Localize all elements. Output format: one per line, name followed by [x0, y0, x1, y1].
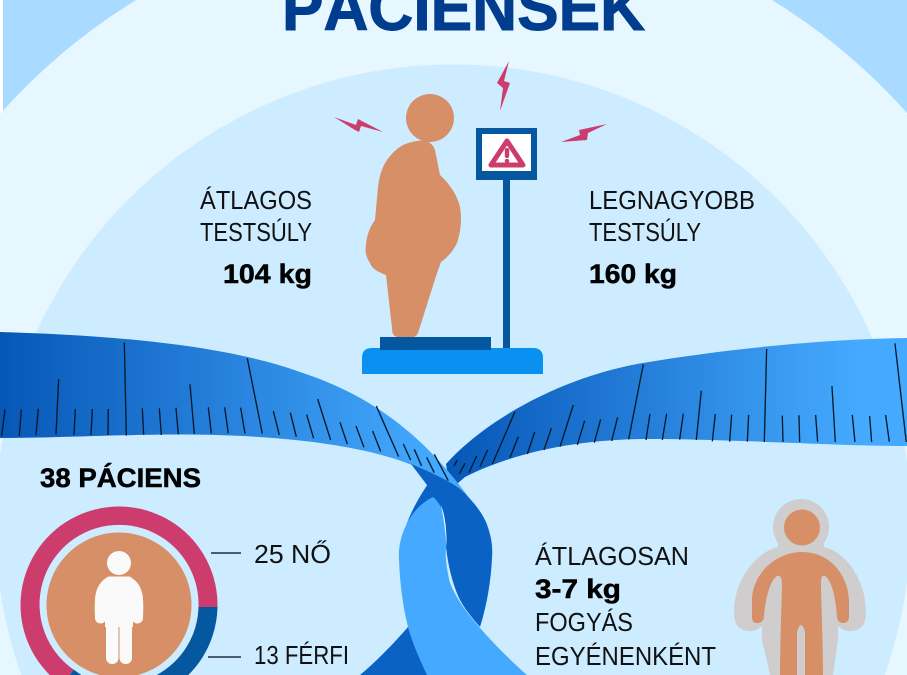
text: largest weight: 160 kg	[589, 259, 677, 289]
grey former silhouette	[734, 499, 866, 675]
scale pole	[503, 178, 510, 350]
label: women: 25 NŐ	[254, 539, 331, 569]
measuring tape: right band	[446, 338, 907, 490]
measuring tape: left band	[0, 332, 487, 524]
donut center disk	[46, 533, 192, 675]
text: average weight: 104 kg	[223, 259, 312, 289]
scale	[362, 128, 543, 374]
text: average weight: TESTSÚLY	[200, 217, 312, 247]
warning sign	[476, 128, 537, 180]
text: largest weight: TESTSÚLY	[589, 217, 701, 247]
label: women	[211, 539, 331, 569]
right tape ticks	[454, 343, 906, 474]
ribbon: lower left dark band	[360, 627, 430, 675]
orange current silhouette	[752, 510, 849, 675]
ribbon: light front band	[399, 497, 527, 675]
text: weight loss	[535, 541, 716, 671]
text: weight loss: 3-7 kg	[535, 574, 621, 604]
scale platform	[380, 337, 491, 350]
text: weight loss: FOGYÁS	[535, 607, 633, 637]
patients heading: 38 PÁCIENS	[40, 462, 201, 493]
donut segment: men	[70, 607, 218, 675]
lightning bolts	[334, 61, 607, 142]
left margin strip	[0, 0, 3, 130]
icon: weight loss figure	[734, 499, 866, 675]
overweight person	[366, 94, 461, 337]
text: largest weight: LEGNAGYOBB	[589, 185, 755, 215]
text: weight loss: EGYÉNENKÉNT	[535, 641, 716, 671]
ribbon: highlight sliver	[441, 505, 447, 547]
text: weight loss: ÁTLAGOSAN	[535, 541, 689, 571]
text: average weight	[200, 185, 312, 289]
text: largest weight	[589, 185, 755, 289]
icon: white person	[100, 551, 138, 664]
ribbon: dark fold	[411, 464, 492, 627]
donut chart: gender split	[21, 507, 218, 675]
label: men: 13 FÉRFI	[254, 640, 349, 670]
donut segment: women	[21, 507, 218, 675]
left tape ticks	[2, 342, 448, 481]
scale base	[362, 348, 543, 374]
text: average weight: ÁTLAGOS	[200, 185, 312, 215]
ribbon: dark link behind loop	[407, 478, 450, 523]
